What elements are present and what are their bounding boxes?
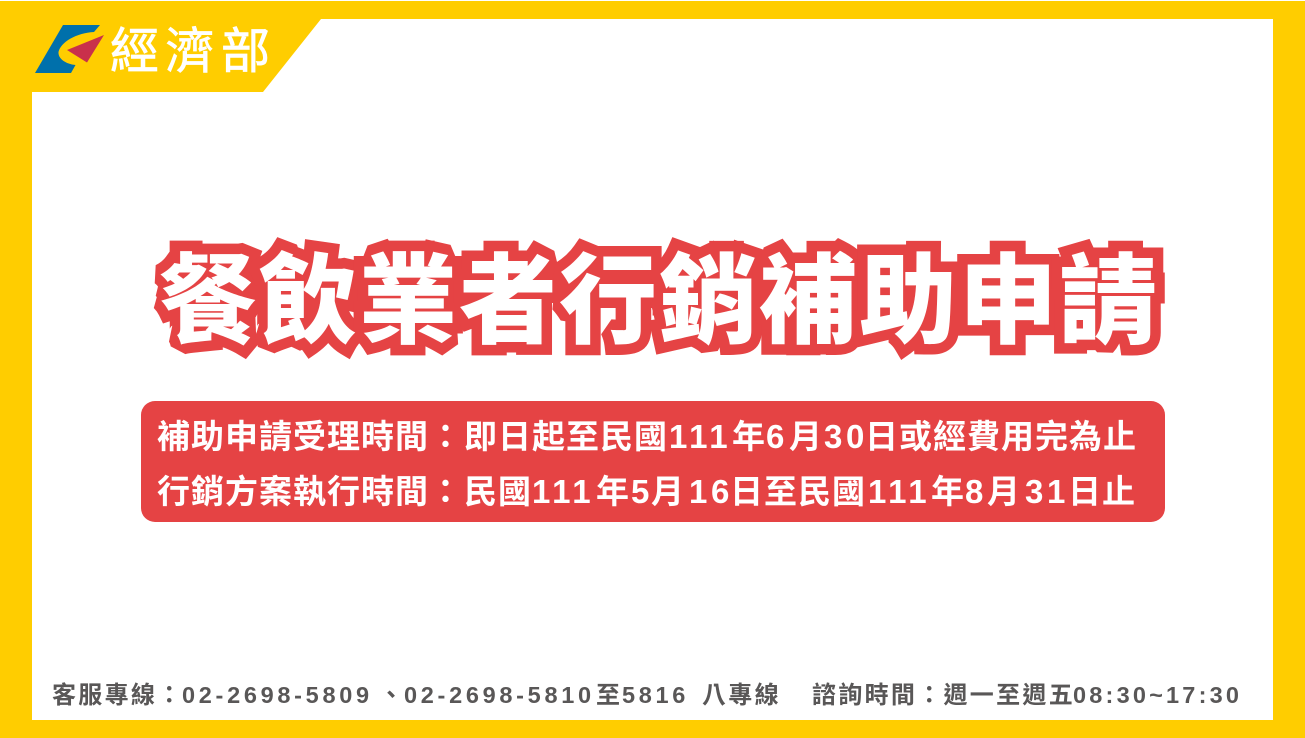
text: application period: 即日起至民國 (464, 410, 668, 458)
text: campaign period: 111 (868, 473, 930, 510)
text: application period: 年 (732, 410, 766, 458)
text: application period: 6 (766, 418, 788, 455)
text: service hotline: 至 (596, 675, 622, 710)
text: service hotline: 客服專線： (52, 675, 184, 710)
text: application period: 日或經費用完為止 (865, 410, 1137, 458)
text: service hotline: 、 (379, 675, 405, 710)
title: 餐飲業者行銷補助申請 (159, 222, 1159, 364)
text: campaign period: 日止 (1068, 465, 1136, 513)
icon: logo emblem (35, 25, 104, 73)
text: service hotline: 5816 (622, 682, 689, 708)
footer: contact information (52, 675, 1242, 710)
logo: ministry of economic affairs (35, 12, 277, 83)
text: service hours: 諮詢時間：週一至週五 (812, 675, 1075, 710)
text: campaign period: 月 (987, 465, 1021, 513)
text: campaign period: 5 (631, 473, 653, 510)
text: campaign period: 月 (651, 465, 685, 513)
text: campaign period: 111 (532, 473, 594, 510)
text: campaign period: 日至民國 (730, 465, 866, 513)
text: application period: 補助申請受理時間： (157, 410, 463, 458)
text: service hotline: 八專線 (702, 675, 781, 710)
text: campaign period: 8 (965, 473, 987, 510)
text: application period: 111 (669, 418, 731, 455)
text: application period: 月 (789, 410, 823, 458)
text: service hotline: 02-2698-5810 (404, 682, 595, 708)
text: service hours: 08:30~17:30 (1073, 682, 1242, 708)
text: service hotline: 02-2698-5809 (182, 682, 373, 708)
text: application period: 30 (824, 418, 868, 455)
text: campaign period: 民國 (464, 465, 532, 513)
text: campaign period: 年 (931, 465, 965, 513)
logo wordmark: 經濟部 (110, 12, 277, 83)
title: 餐飲業者行銷補助申請 (159, 222, 1159, 364)
text: campaign period: 行銷方案執行時間： (157, 465, 463, 513)
text: campaign period: 16 (689, 473, 733, 510)
panel: application dates (141, 401, 1165, 522)
text: campaign period: 年 (596, 465, 630, 513)
text: campaign period: 31 (1025, 473, 1069, 510)
